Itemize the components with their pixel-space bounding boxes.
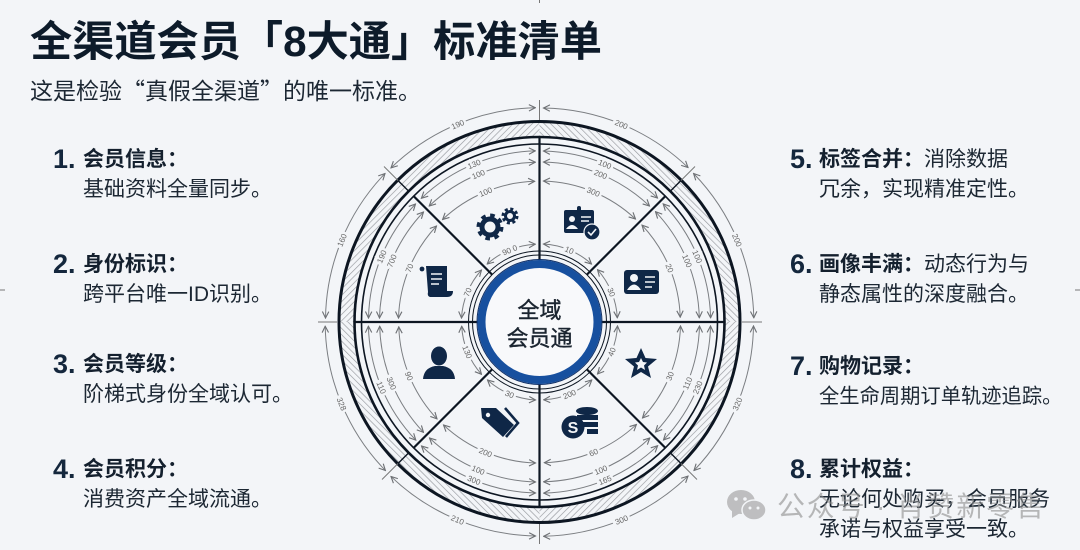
dimension labels: 40 <box>606 346 618 358</box>
item 5: 冗余，实现精准定性。 <box>819 178 1029 201</box>
text: 3. <box>53 349 76 379</box>
item 1: 基础资料全量同步。 <box>83 178 272 201</box>
text: 6. <box>790 249 813 279</box>
icon: scroll <box>420 266 453 297</box>
dimension labels <box>335 118 745 527</box>
dimension labels: 70 <box>462 286 474 298</box>
dimension labels: 300 <box>585 185 602 199</box>
item 2: 跨平台唯一ID识别。 <box>83 283 272 306</box>
item 4: 会员积分： <box>83 458 188 481</box>
outer ring lines <box>339 122 740 522</box>
dimension labels: 230 <box>691 379 705 396</box>
dimension labels: 100 <box>593 463 609 477</box>
item 3: 会员等级： <box>83 353 188 376</box>
icon: coins <box>562 407 598 438</box>
dimension labels: 100 <box>478 185 494 199</box>
item 4: 消费资产全域流通。 <box>83 488 272 511</box>
text: 8. <box>790 454 813 484</box>
item 8 <box>790 454 1050 541</box>
dimension labels: 200 <box>593 168 609 182</box>
dimension labels: 70 <box>404 262 416 274</box>
subtitle: 这是检验“真假全渠道”的唯一标准。 <box>30 72 421 106</box>
dimension labels: 20 <box>663 262 675 275</box>
dimension labels: 300 <box>614 513 630 527</box>
item 5 <box>790 144 1029 201</box>
item 7 <box>790 351 1062 408</box>
item 8: 承诺与权益享受一致。 <box>819 518 1029 541</box>
dimension labels: 100 <box>470 464 486 477</box>
dimension labels: 200 <box>477 446 494 460</box>
central hub: 会员通 <box>506 326 573 351</box>
dimension labels: 90 <box>403 370 415 382</box>
item 1: 会员信息： <box>83 148 188 171</box>
icon: tags <box>481 408 518 437</box>
item 5: 标签合并：消除数据 <box>819 148 1008 171</box>
dimension labels: 165 <box>597 474 614 487</box>
hatched ring <box>347 130 732 514</box>
dimension labels: 130 <box>466 158 483 171</box>
dimension labels: 200 <box>613 118 630 132</box>
item 6 <box>790 249 1029 306</box>
dimension labels: 100 <box>471 168 487 181</box>
dimension labels: 210 <box>450 513 466 527</box>
dimension labels: 100 <box>680 253 694 269</box>
icon: star <box>625 348 657 378</box>
item 6: 静态属性的深度融合。 <box>819 283 1029 306</box>
item 2 <box>53 249 272 306</box>
dimension labels: 700 <box>385 253 399 269</box>
sector dividers <box>354 137 725 507</box>
central hub: 全域 <box>517 298 562 323</box>
text: 1. <box>53 144 76 174</box>
dimension arcs <box>325 108 754 536</box>
item 3 <box>53 349 293 406</box>
icon: id card <box>624 270 659 294</box>
dimension labels: 110 <box>374 380 388 396</box>
item 7: 全生命周期订单轨迹追踪。 <box>819 386 1062 408</box>
central hub <box>477 260 602 384</box>
item 7: 购物记录： <box>819 355 924 378</box>
dimension labels: 30 <box>664 370 676 382</box>
watermark: 公众号 · 肖赞新零售 <box>777 491 1046 522</box>
item 3: 阶梯式身份全域认可。 <box>83 383 293 406</box>
text: 4. <box>53 454 76 484</box>
dimension labels: 30 <box>605 287 617 299</box>
dimension labels: 110 <box>681 375 695 391</box>
dimension labels: 190 <box>375 248 389 265</box>
dimension labels: 200 <box>562 388 578 401</box>
dimension labels: 10 <box>563 245 575 256</box>
item 2: 身份标识： <box>83 253 188 276</box>
text: 2. <box>53 249 76 279</box>
icon: member badge <box>564 206 600 240</box>
dimension labels: 90 0 <box>501 243 519 258</box>
text: 5. <box>790 144 813 174</box>
dimension labels: 130 <box>460 344 474 360</box>
item 8: 累计权益： <box>819 458 924 481</box>
dimension labels: 100 <box>690 249 704 265</box>
dimension labels: 300 <box>466 474 482 487</box>
dimension labels: 328 <box>335 396 348 412</box>
icon: person <box>423 346 455 379</box>
icon: coins: S <box>568 420 579 437</box>
dimension labels: 190 <box>450 118 466 131</box>
dimension labels: 200 <box>730 232 744 249</box>
dimension labels: 320 <box>731 396 745 412</box>
icon: gears <box>478 209 517 238</box>
title: 全渠道会员「8大通」标准清单 <box>30 18 602 65</box>
dimension labels: 160 <box>336 232 349 248</box>
item 6: 画像丰满：动态行为与 <box>819 253 1029 276</box>
item 4 <box>53 454 272 511</box>
dimension labels: 300 <box>385 376 398 392</box>
item 1 <box>53 144 272 201</box>
dimension labels: 60 <box>588 447 600 459</box>
dimension labels: 100 <box>597 158 613 171</box>
text: 7. <box>790 351 813 381</box>
item 8: 无论何处购买，会员服务 <box>819 488 1050 511</box>
dimension labels: 30 <box>504 389 516 401</box>
